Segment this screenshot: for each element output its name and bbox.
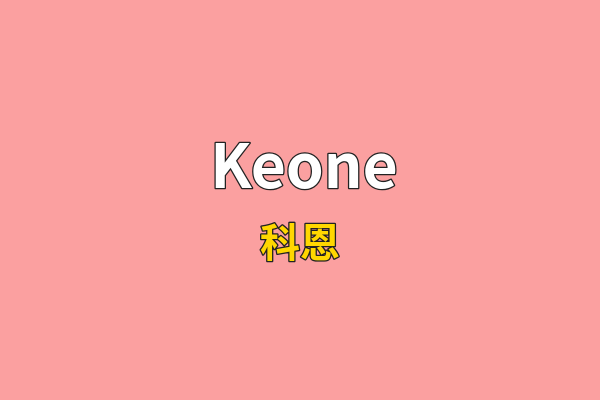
subtitle: 科恩: 科恩 [260,211,340,269]
title: Keone: Keone [210,119,398,206]
